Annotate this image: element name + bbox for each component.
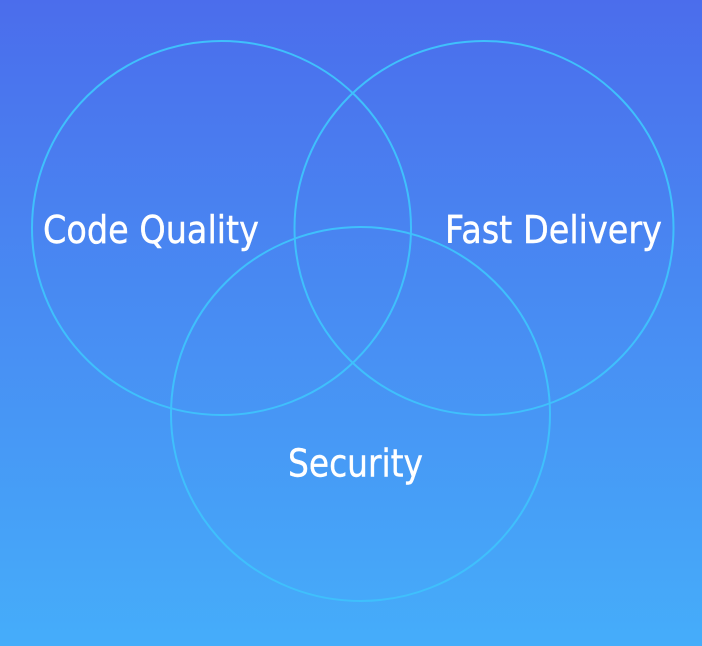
circle: security	[171, 227, 550, 601]
label: code quality: Code Quality	[43, 208, 259, 252]
circle: code quality	[32, 41, 411, 415]
label: security: Security	[288, 442, 423, 486]
circle: fast delivery	[294, 41, 674, 415]
label: fast delivery: Fast Delivery	[445, 208, 662, 252]
